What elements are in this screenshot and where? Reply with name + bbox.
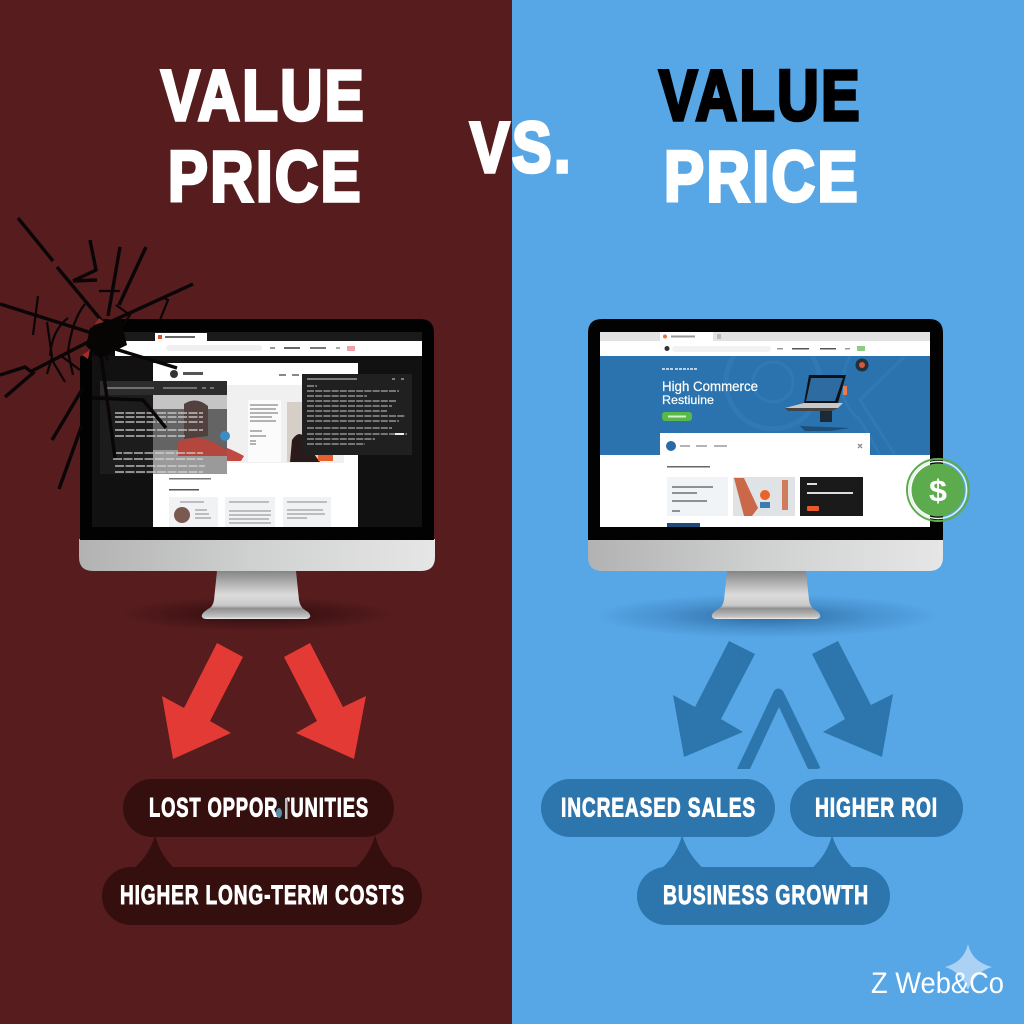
label: lost opportunities: LOST OPPORTUNITIES xyxy=(149,792,369,822)
right website screen: Restiuine xyxy=(662,393,714,407)
left website screen xyxy=(92,332,422,527)
heading: left value over price: VALUE xyxy=(161,57,366,136)
arrow: right blue arrow down-right xyxy=(812,641,893,757)
label: increased sales: INCREASED SALES xyxy=(561,792,756,822)
pill group: right outcomes xyxy=(541,779,963,925)
heading: left value over price: PRICE xyxy=(168,138,363,217)
icon: green dollar coin xyxy=(907,459,969,521)
label: higher long-term costs: HIGHER LONG-TERM COSTS xyxy=(120,880,405,910)
panel: right blue background xyxy=(512,0,1024,1024)
icon: blue chevron peak xyxy=(737,688,820,769)
label: higher roi: HIGHER ROI xyxy=(815,792,938,822)
dark overlay window left xyxy=(100,381,230,474)
heading: left value over price xyxy=(161,57,366,217)
icon: left monitor with broken website xyxy=(79,319,435,631)
arrow: left red arrow down-left xyxy=(162,643,243,759)
heading: right value over price: PRICE xyxy=(664,138,860,217)
logo: Z Web&Co xyxy=(871,944,1004,1000)
right website screen xyxy=(600,332,930,527)
heading: right value over price xyxy=(659,57,862,217)
small laptop xyxy=(785,375,850,431)
dark overlay window right xyxy=(302,374,412,455)
heading: right value over price: VALUE xyxy=(659,57,862,136)
icon: green dollar coin: $ xyxy=(929,473,947,508)
pill group: left outcomes xyxy=(102,779,422,925)
icon: cracked glass xyxy=(0,218,193,489)
arrow: right blue arrow down-left xyxy=(673,641,755,757)
arrow: left red arrow down-right xyxy=(284,643,366,759)
right website screen: High Commerce xyxy=(662,378,758,394)
glitch smudge over lettering xyxy=(276,796,288,820)
icon: right monitor with clean website xyxy=(588,319,943,638)
label: business growth: BUSINESS GROWTH xyxy=(663,880,869,910)
logo: Z Web&Co: Z Web&Co xyxy=(871,967,1004,1000)
heading: versus label: VS. xyxy=(470,109,573,188)
panel: left maroon background xyxy=(0,0,512,1024)
